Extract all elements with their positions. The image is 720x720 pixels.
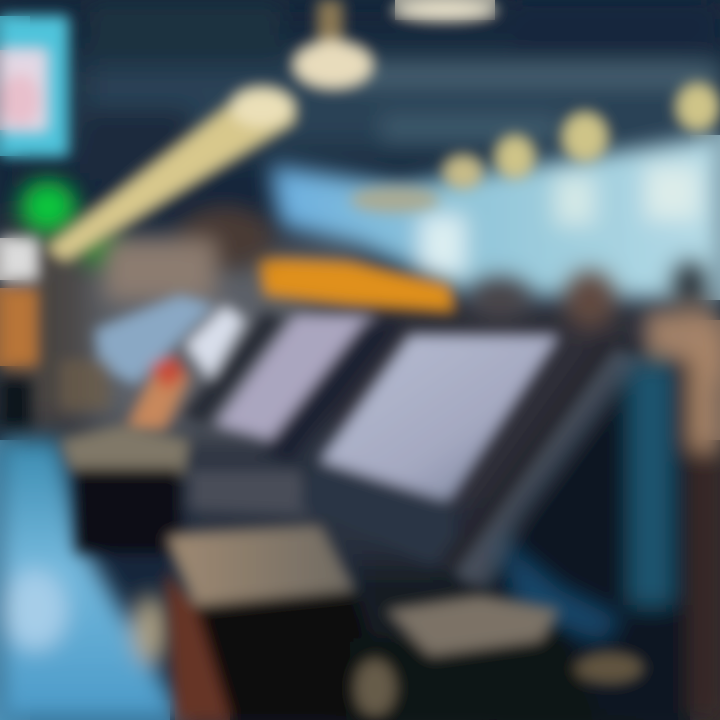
screen: first small tablet kiosk <box>60 295 285 430</box>
screen: bright wall monitor at left <box>0 16 68 156</box>
screen: large central tablet kiosk <box>300 335 560 565</box>
side: orange wood panel and white sign at left <box>0 238 38 430</box>
kiosk: left black stand and counter <box>60 425 310 553</box>
icon: green sign glow <box>20 181 120 266</box>
background: dark area on the right <box>490 330 720 720</box>
counter: front wooden table <box>165 525 390 720</box>
lights: pendant lamps <box>293 0 720 213</box>
screen: middle tablet kiosk <box>215 315 402 465</box>
stand: diagonal kiosk frame arms <box>440 340 650 590</box>
floor: blue reflective floor <box>0 440 185 720</box>
sign: orange banner <box>258 258 455 312</box>
light: long diagonal tube lamp <box>45 87 295 262</box>
counter: right wooden table <box>350 595 644 720</box>
ceiling: dark beams and ducts <box>80 0 720 180</box>
wall: light blue back display band <box>270 135 720 300</box>
figures: distant customers <box>105 206 720 380</box>
